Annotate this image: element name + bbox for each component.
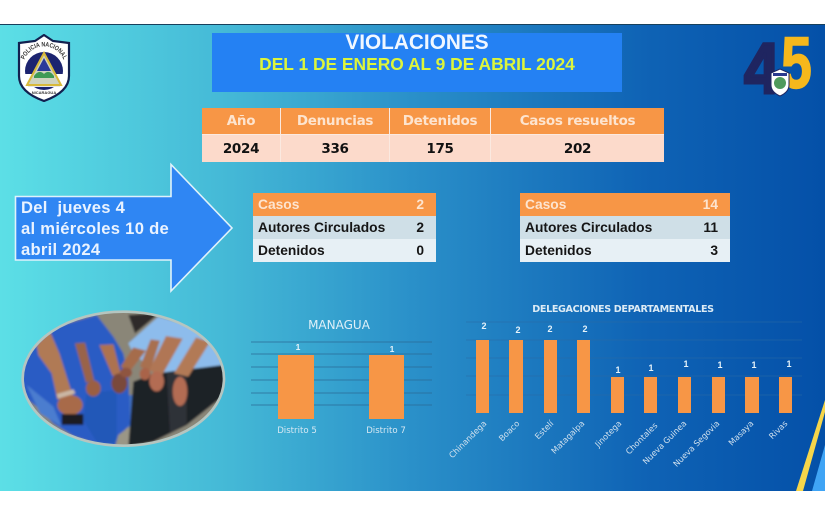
row: Autores Circulados: 2	[416, 220, 424, 235]
bar: Masaya: 1	[751, 360, 757, 370]
bar: Matagalpa: 2	[582, 324, 588, 334]
chart: Managua	[251, 318, 432, 436]
icon: 45 anniversary logo	[744, 30, 812, 102]
bar: Rivas: Rivas	[767, 418, 789, 441]
bar: Chontales: Chontales	[623, 420, 659, 456]
photo: handcuffed detainees	[21, 310, 226, 447]
arrow text: Del jueves 4 al miércoles 10 de abril 2024	[21, 198, 169, 259]
row: Autores Circulados: Autores Circulados	[258, 220, 385, 235]
chart: Delegaciones Departamentales	[447, 304, 802, 469]
bar: Masaya: Masaya	[726, 418, 755, 448]
table: departmental cases	[520, 193, 730, 262]
chart title: MANAGUA	[308, 318, 371, 332]
summary table	[202, 108, 664, 162]
row: Autores Circulados: Autores Circulados	[525, 220, 652, 235]
bar: Boaco	[497, 325, 523, 443]
row: Detenidos: 0	[416, 243, 424, 258]
bar: Nueva Guinea: Nueva Guinea	[640, 418, 688, 466]
bar: Boaco: Boaco	[497, 418, 521, 443]
value: 336	[281, 135, 389, 162]
icon: police shield	[18, 34, 70, 102]
row: Casos: 14	[703, 197, 718, 212]
bar: Nueva Guinea	[640, 359, 691, 466]
table header: Casos resueltos	[491, 108, 664, 134]
bar: Distrito 7: Distrito 7	[366, 426, 406, 436]
row: Detenidos: Detenidos	[525, 243, 592, 258]
table header: Denuncias	[281, 108, 389, 134]
bar: Matagalpa: Matagalpa	[549, 418, 586, 456]
bar: Jinotega: 1	[615, 365, 621, 375]
row: Detenidos: Detenidos	[258, 243, 325, 258]
bar: Chinandega: Chinandega	[447, 418, 488, 460]
bar: Distrito 5	[277, 342, 317, 436]
row: Casos: 2	[416, 197, 424, 212]
row: Casos: Casos	[258, 197, 299, 212]
title banner	[212, 33, 622, 92]
bar: Estelí	[533, 324, 557, 441]
row: Autores Circulados	[520, 216, 730, 239]
row: Casos	[520, 193, 730, 216]
icon: police shield: NICARAGUA	[32, 90, 56, 95]
chart title: DELEGACIONES DEPARTAMENTALES	[532, 304, 714, 315]
value: 175	[390, 135, 490, 162]
bar: Nueva Segovia	[671, 360, 725, 469]
bar: Chinandega	[447, 321, 489, 460]
value: 202: 202	[564, 140, 591, 156]
arrow: date range	[14, 162, 233, 293]
bar: Matagalpa	[549, 324, 590, 456]
bar: Nueva Guinea: 1	[683, 359, 689, 369]
value: 175: 175	[426, 140, 454, 156]
bar: Masaya	[726, 360, 759, 448]
icon: police shield: POLICIA NACIONAL	[20, 42, 67, 60]
bar: Estelí: 2	[547, 324, 553, 334]
table header: Denuncias: Denuncias	[297, 113, 373, 129]
bar: Distrito 5: 1	[296, 342, 301, 352]
bar: Distrito 5: Distrito 5	[277, 426, 317, 436]
table header: Detenidos: Detenidos	[403, 113, 477, 129]
bar: Chontales	[623, 363, 659, 456]
row: Detenidos	[520, 239, 730, 262]
bar: Distrito 7: 1	[390, 344, 395, 354]
bar: Estelí: Estelí	[533, 418, 556, 441]
corner accent	[796, 400, 825, 491]
row: Casos: Casos	[525, 197, 566, 212]
table header: Año	[202, 108, 280, 134]
bar: Boaco: 2	[515, 325, 521, 335]
bar: Distrito 7	[366, 344, 406, 436]
table backing	[202, 108, 664, 162]
bar: Nueva Segovia: 1	[717, 360, 723, 370]
subtitle: DEL 1 DE ENERO AL 9 DE ABRIL 2024	[259, 54, 575, 74]
table header: Casos resueltos: Casos resueltos	[520, 113, 635, 129]
table: Managua cases	[253, 193, 436, 262]
bar: Rivas: 1	[786, 359, 792, 369]
row: Casos	[253, 193, 436, 216]
bar: Jinotega: Jinotega	[592, 418, 623, 450]
bar: Jinotega	[592, 365, 624, 450]
value: 336: 336	[321, 140, 349, 156]
table header: Año: Año	[227, 113, 255, 129]
table header: Detenidos	[390, 108, 490, 134]
value: 2024	[202, 135, 280, 162]
value: 2024: 2024	[223, 140, 259, 156]
bar: Chinandega: 2	[481, 321, 487, 331]
row: Detenidos	[253, 239, 436, 262]
row: Autores Circulados	[253, 216, 436, 239]
bar: Chontales: 1	[648, 363, 654, 373]
row: Detenidos: 3	[710, 243, 718, 258]
bar: Nueva Segovia: Nueva Segovia	[671, 418, 721, 469]
row: Autores Circulados: 11	[703, 220, 718, 235]
value: 202	[491, 135, 664, 162]
title: VIOLACIONES	[345, 31, 489, 54]
bar: Rivas	[767, 359, 792, 441]
